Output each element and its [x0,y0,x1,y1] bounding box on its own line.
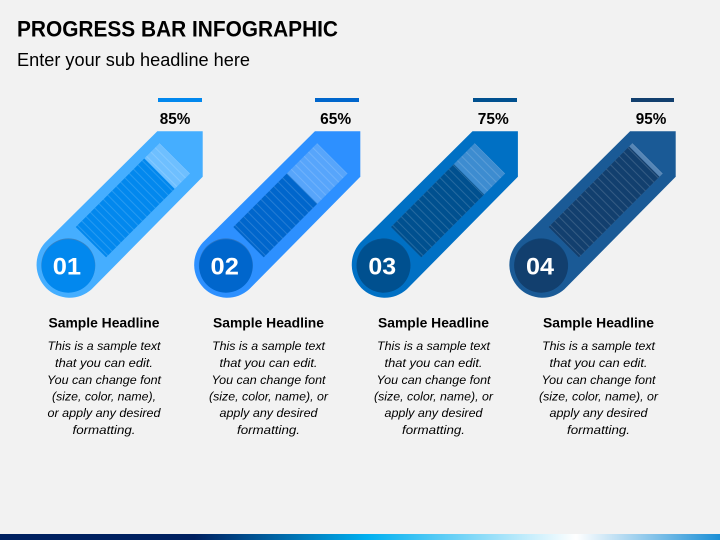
body text 03: that you can edit. [384,356,482,370]
headline 02: Sample Headline [213,316,324,330]
body text 01: This is a sample text [48,339,161,353]
body text 02 [209,339,329,437]
legend bar 04 [631,98,674,102]
progress bar 02 [233,143,347,257]
percentage 65%: 65% [320,111,351,128]
body text 01: that you can edit. [55,356,153,370]
percentage 75%: 75% [478,111,509,128]
number badge 01: 01 [53,254,81,280]
body text 02: formatting. [237,423,300,437]
body text 02: This is a sample text [212,339,326,353]
legend bar 01 [158,98,202,102]
progress bar 04 [548,143,663,257]
number badge 04 [514,238,568,293]
footer gradient strip [0,534,720,540]
panel: progress 02 [194,98,360,437]
percentage 95%: 95% [636,111,666,128]
panel: progress 01 [37,98,203,437]
body text 02: (size, color, name), or [209,390,329,404]
progress bar 01 [76,143,190,257]
body text 04: (size, color, name), or [539,390,659,404]
title: PROGRESS BAR INFOGRAPHIC [17,16,338,42]
body text 03: This is a sample text [377,339,491,353]
body text 01 [47,339,162,437]
headline 04: Sample Headline [543,316,654,330]
headline 01: Sample Headline [48,316,160,330]
progress bar 03 [391,143,505,257]
pencil body 01 [37,131,203,298]
body text 01: formatting. [72,423,136,437]
legend bar 03 [473,98,517,102]
body text 03: (size, color, name), or [374,390,494,404]
body text 01: You can change font [47,373,162,387]
panel: progress 03 [352,98,518,437]
body text 04: apply any desired [550,406,649,420]
pencil body 02 [194,131,360,298]
number badge 02: 02 [211,254,239,280]
body text 03: apply any desired [384,406,484,420]
body text 04: This is a sample text [542,339,656,353]
subtitle: Enter your sub headline here [17,50,250,70]
body text 03 [374,339,494,437]
panel: progress 04 [509,98,676,437]
body text 04 [539,339,659,437]
body text 04: that you can edit. [550,356,648,370]
body text 04: You can change font [542,373,656,387]
body text 04: formatting. [567,423,630,437]
body text 01: or apply any desired [48,406,162,420]
body text 03: formatting. [402,423,465,437]
pencil body 03 [352,131,518,298]
number badge 03 [356,238,410,293]
number badge 04: 04 [526,254,555,280]
number badge 01 [41,238,95,293]
pencil body 04 [509,131,676,298]
body text 02: that you can edit. [220,356,318,370]
body text 01: (size, color, name), [52,390,156,404]
body text 02: apply any desired [220,406,319,420]
number badge 02 [199,238,253,293]
body text 03: You can change font [376,373,491,387]
body text 02: You can change font [212,373,326,387]
percentage 85%: 85% [160,111,190,128]
number badge 03: 03 [368,254,396,280]
headline 03: Sample Headline [378,316,489,330]
legend bar 02 [315,98,359,102]
